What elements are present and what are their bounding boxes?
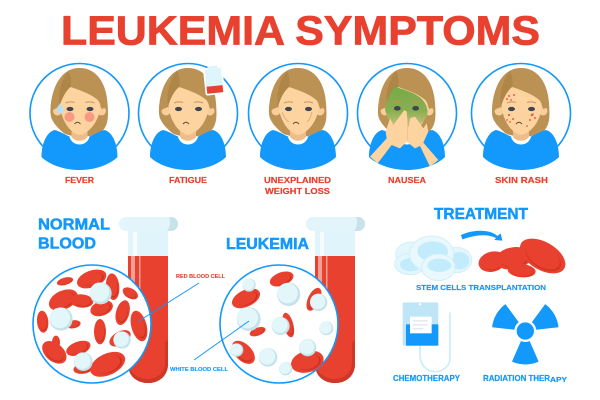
- heading: normal blood: [38, 216, 110, 252]
- label: unexplained weight loss: UNEXPLAINED: [264, 175, 331, 185]
- heading: normal blood: NORMAL: [38, 216, 110, 234]
- label: unexplained weight loss: [264, 175, 331, 196]
- label: fever: FEVER: [65, 175, 94, 185]
- label: chemotherapy: CHEMOTHERAPY: [393, 373, 460, 383]
- icon: low battery: [203, 65, 224, 95]
- icon: sunken cheek lines: [282, 112, 312, 122]
- callout: white blood cell: [170, 321, 249, 373]
- label: nausea: NAUSEA: [388, 175, 426, 185]
- heading: normal blood: BLOOD: [38, 236, 96, 252]
- panel: fever: [30, 64, 129, 185]
- icon: chemotherapy iv bag: [403, 302, 450, 372]
- label: fatigue: FATIGUE: [169, 175, 207, 185]
- panel: skin rash: [472, 64, 570, 185]
- icon: green face and hands: [370, 87, 438, 167]
- label: unexplained weight loss: WEIGHT LOSS: [265, 186, 330, 196]
- panel: unexplained weight loss: [248, 64, 348, 196]
- label: radiation therapy: RADIATION THER: [483, 373, 550, 383]
- chart: normal blood magnified cells: [33, 265, 151, 383]
- icon: leukemia test tube: [306, 217, 365, 383]
- panel: fatigue: [138, 64, 238, 185]
- icon: radiation symbol: [490, 303, 561, 364]
- arrow: stem cells to red cells: [461, 231, 502, 241]
- icon: stem cells: [395, 236, 472, 281]
- icon: red blood cells: [476, 231, 571, 281]
- callout: white blood cell: WHITE BLOOD CELL: [170, 367, 229, 373]
- icon: normal blood test tube: [119, 217, 178, 383]
- icon: sweat drop: [56, 103, 64, 114]
- chart: leukemia magnified cells: [220, 265, 338, 383]
- heading: leukemia: LEUKEMIA: [226, 236, 309, 253]
- panel: nausea: [358, 64, 456, 185]
- icon: rash spots: [506, 94, 536, 127]
- title: LEUKEMIA SYMPTOMS: [61, 8, 540, 54]
- label: stem cells transplantation: STEM CELLS TRANSPLANTATION: [416, 283, 546, 292]
- label: radiation therapy: APY: [550, 375, 567, 384]
- callout: red blood cell: RED BLOOD CELL: [176, 274, 226, 280]
- icon: red cheeks: [64, 112, 94, 122]
- heading: treatment: TREATMENT: [434, 206, 529, 223]
- callout: red blood cell: [139, 274, 226, 321]
- label: skin rash: SKIN RASH: [495, 175, 548, 185]
